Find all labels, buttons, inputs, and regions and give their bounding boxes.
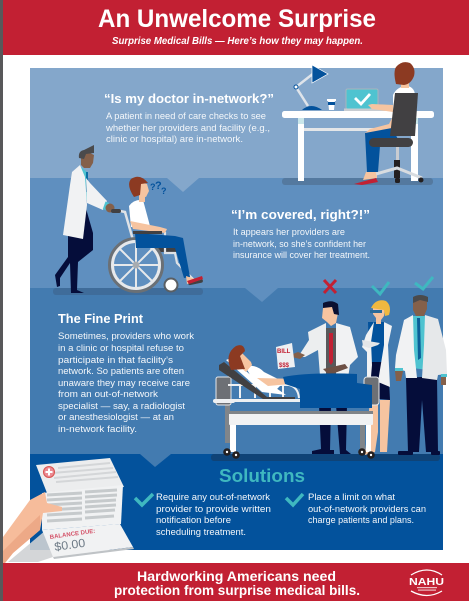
patient in bed — [226, 345, 372, 408]
check icon — [286, 494, 303, 505]
NAHU logo: NAHU — [409, 576, 444, 588]
bill document: BILL — [277, 349, 291, 355]
solution text 1 — [156, 492, 271, 538]
teal check mark — [415, 277, 433, 289]
bill document: $$$ — [279, 363, 290, 369]
NAHU logo — [409, 570, 444, 596]
header banner — [3, 0, 469, 55]
body text: or anesthesiologist — at an — [58, 412, 174, 423]
solution text 1: scheduling treatment. — [156, 527, 246, 538]
body text: whether her providers and facility (e.g., — [105, 123, 270, 134]
panel: solutions — [30, 454, 443, 550]
solution text 2: Place a limit on what — [308, 492, 395, 503]
coffee cup — [327, 99, 336, 110]
body text: from an out-of-network — [58, 389, 158, 400]
body text — [58, 331, 194, 435]
balance amount: $0.00 — [53, 536, 86, 554]
footer message: Hardworking Americans need — [137, 568, 336, 584]
body text: Sometimes, providers who work — [58, 331, 194, 342]
heading: “I’m covered, right?!” — [231, 207, 370, 222]
body text: in-network facility. — [58, 424, 137, 435]
footer message: protection from surprise medical bills. — [114, 582, 360, 598]
body text: network. So patients are often — [58, 366, 184, 377]
body text: participate in that facility’s — [58, 355, 173, 366]
clipboard — [323, 364, 348, 374]
panel: the fine print — [30, 288, 443, 454]
body text: in-network, so she’s confident her — [233, 239, 367, 250]
woman at desk — [354, 62, 416, 185]
solution text 2 — [308, 492, 426, 526]
solution text 1: Require any out-of-network — [156, 492, 270, 503]
question marks: ? — [161, 186, 166, 196]
question marks: ? — [155, 180, 162, 192]
solution text 1: provider to provide written — [156, 504, 271, 515]
teal check mark — [372, 282, 389, 294]
office chair — [369, 93, 424, 183]
wheelchair — [110, 209, 203, 292]
body text: A patient in need of care checks to see — [106, 111, 266, 122]
body text: specialist — say, a radiologist — [58, 401, 185, 412]
heading: “Is my doctor in-network?” — [104, 91, 274, 106]
body text: insurance will cover her treatment. — [233, 250, 370, 261]
illustration: hand holding balance-due paper — [3, 458, 134, 563]
body text — [105, 111, 270, 145]
heading: The Fine Print — [58, 311, 144, 326]
panel: is my doctor in-network — [30, 68, 443, 178]
solution text 2: charge patients and plans. — [308, 515, 414, 526]
doctor in blue tie — [395, 295, 447, 455]
question marks: ? — [150, 182, 156, 192]
body text: unaware they may receive care — [58, 378, 190, 389]
subtitle: Surprise Medical Bills — Here’s how they may happen. — [112, 36, 363, 47]
doctor with glasses — [362, 300, 392, 455]
illustration: doctor pushing wheelchair — [53, 145, 203, 295]
body text: in a clinic or hospital refuse to — [58, 343, 184, 354]
solution text 2: out-of-network providers can — [308, 504, 426, 515]
check icon — [135, 494, 153, 505]
illustration: patient at desk — [282, 62, 434, 185]
solution text 1: notification before — [156, 515, 231, 526]
heading: Solutions — [219, 466, 305, 486]
doctor with bill — [288, 301, 358, 454]
title: An Unwelcome Surprise — [98, 5, 376, 33]
footer message — [114, 568, 360, 598]
balance due label: BALANCE DUE: — [49, 529, 96, 541]
footer banner — [3, 563, 469, 601]
illustration: doctors and hospital bed — [211, 277, 447, 461]
body text: clinic or hospital) are in-network. — [106, 134, 243, 145]
seated patient — [129, 177, 203, 284]
body text — [233, 227, 370, 261]
laptop with check — [344, 89, 386, 111]
body text: It appears her providers are — [233, 227, 345, 238]
question marks — [150, 180, 166, 196]
hospital bed — [213, 362, 379, 459]
lamp — [294, 65, 328, 110]
panel: I'm covered — [30, 178, 443, 288]
red x mark — [324, 280, 336, 293]
doctor — [55, 145, 114, 293]
bill document — [276, 343, 295, 369]
